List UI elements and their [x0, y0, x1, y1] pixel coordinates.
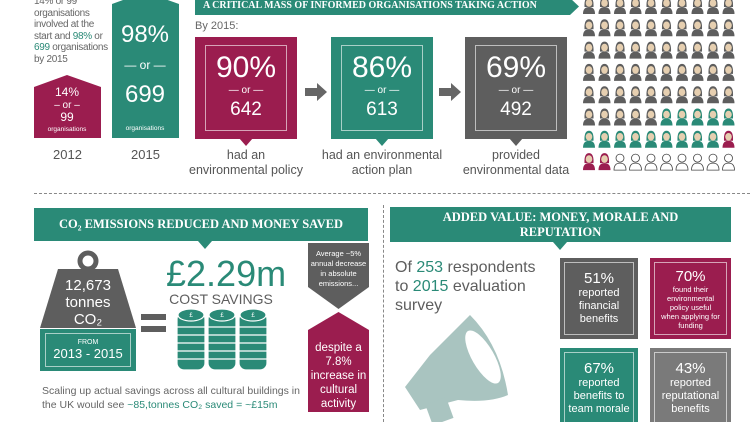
- down arrow emissions: Average ~5%: [316, 249, 361, 258]
- box 43%: reputational: [662, 390, 719, 402]
- text: COST SAVINGS: [169, 291, 273, 307]
- header: CO2: [34, 208, 368, 241]
- intro text: involved at the: [34, 19, 94, 30]
- respondents text: survey: [395, 297, 442, 314]
- coins: £: [251, 313, 255, 319]
- box 43%: reported: [670, 377, 711, 389]
- by 2015: By 2015:: [195, 20, 238, 32]
- text action plan: action plan: [352, 163, 412, 177]
- header: critical mass: A CRITICAL MASS OF INFORMED ORGANISATIONS TAKING ACTION: [203, 0, 537, 11]
- date box: [40, 329, 136, 371]
- scaling text: [42, 385, 300, 410]
- respondents text: Of 253 respondents: [395, 259, 536, 276]
- house 2012: 14%: [55, 85, 79, 99]
- intro text: organisations: [34, 8, 90, 18]
- text action plan: [322, 148, 442, 177]
- text action plan: had an environmental: [322, 148, 442, 162]
- text env data: environmental data: [463, 163, 569, 177]
- box 51%: 51%: [584, 270, 614, 287]
- box 51%: [560, 258, 638, 339]
- box 69%: [465, 37, 567, 139]
- house 2012: organisations: [48, 126, 87, 133]
- box 86%: 86%: [352, 51, 412, 84]
- box 51%: financial: [579, 300, 619, 312]
- box 69%: 492: [500, 99, 532, 120]
- box 69%: 69%: [486, 51, 546, 84]
- text env data: [463, 148, 570, 177]
- coins: [178, 310, 266, 370]
- box 67%: 67%: [584, 360, 614, 377]
- up arrow activity: despite a: [315, 342, 362, 354]
- down arrow emissions: [308, 243, 369, 309]
- weight icon: [40, 250, 136, 328]
- weight icon: tonnes: [65, 294, 111, 311]
- house 2015: 98%: [121, 21, 169, 48]
- arrow 2: [439, 83, 461, 101]
- date box: FROM: [78, 339, 98, 346]
- box 70%: policy useful: [670, 303, 711, 312]
- text policy: had an: [227, 148, 265, 162]
- box 43%: benefits: [671, 403, 710, 415]
- down arrow emissions: emissions...: [319, 279, 358, 288]
- header: critical mass: [195, 0, 570, 15]
- scaling text: the UK would see ~85,tonnes CO₂ saved = ~£15m: [42, 398, 278, 410]
- house 2012: 99: [60, 110, 74, 124]
- intro text: start and 98% or: [34, 30, 103, 42]
- box 67%: reported: [578, 377, 619, 389]
- text policy: [189, 148, 303, 177]
- header: added value: [390, 207, 731, 242]
- box 70%: [650, 258, 731, 339]
- up arrow activity: cultural: [320, 384, 357, 396]
- box 67%: [560, 348, 638, 422]
- arrow 1: [305, 83, 327, 101]
- box 67%: team morale: [568, 403, 630, 415]
- intro text: 699 organisations: [34, 42, 108, 53]
- house 2015: organisations: [126, 125, 165, 132]
- box 43%: [650, 348, 731, 422]
- people grid: [583, 0, 735, 170]
- text: 2015: [131, 147, 160, 162]
- box 90%: 642: [230, 99, 262, 120]
- down arrow emissions: in absolute: [320, 269, 357, 278]
- box 86%: 613: [366, 99, 398, 120]
- text policy: environmental policy: [189, 163, 303, 177]
- box 69%: — or —: [499, 85, 533, 96]
- intro text: [34, 0, 108, 64]
- house 2015: — or —: [124, 58, 166, 72]
- up arrow activity: increase in: [311, 370, 366, 382]
- house 2012: – or –: [54, 100, 80, 111]
- box 70%: when applying for: [661, 312, 720, 321]
- equals: [141, 314, 166, 332]
- house 2012: [34, 75, 101, 138]
- box 70%: 70%: [675, 268, 706, 285]
- intro text: by 2015: [34, 54, 68, 64]
- box 70%: environmental: [667, 294, 714, 303]
- cost savings: £2.29m: [166, 253, 286, 294]
- year labels: 2012: [53, 147, 82, 162]
- respondents text: to 2015 evaluation: [395, 278, 526, 295]
- coins: £: [220, 313, 224, 319]
- box 51%: benefits: [580, 313, 618, 325]
- box 90%: 90%: [216, 51, 276, 84]
- box 70%: found their: [673, 285, 708, 294]
- house 2015: [112, 0, 179, 138]
- box 51%: reported: [578, 287, 619, 299]
- up arrow activity: activity: [321, 398, 356, 410]
- header: added value: ADDED VALUE: MONEY, MORALE AND: [443, 210, 678, 224]
- up arrow activity: [308, 312, 369, 412]
- scaling text: Scaling up actual savings across all cultural buildings in: [42, 385, 300, 397]
- box 86%: [331, 37, 433, 139]
- box 67%: benefits to: [574, 390, 624, 402]
- coins: £: [189, 313, 193, 319]
- header: added value: REPUTATION: [520, 225, 601, 239]
- text env data: provided: [492, 148, 540, 162]
- date box: 2013 - 2015: [53, 346, 123, 361]
- megaphone: [405, 315, 508, 422]
- weight icon: CO₂: [74, 311, 102, 328]
- box 43%: 43%: [675, 360, 706, 377]
- box 86%: — or —: [365, 85, 399, 96]
- box 90%: — or —: [229, 85, 263, 96]
- down arrow emissions: annual decrease: [311, 259, 366, 268]
- weight icon: 12,673: [65, 277, 111, 294]
- respondents text: [395, 259, 536, 314]
- header: CO2: CO₂ EMISSIONS REDUCED AND MONEY SAVED: [59, 217, 343, 231]
- box 70%: funding: [678, 321, 703, 330]
- house 2015: 699: [125, 81, 165, 108]
- up arrow activity: 7.8%: [325, 356, 352, 368]
- box 90%: [195, 37, 297, 139]
